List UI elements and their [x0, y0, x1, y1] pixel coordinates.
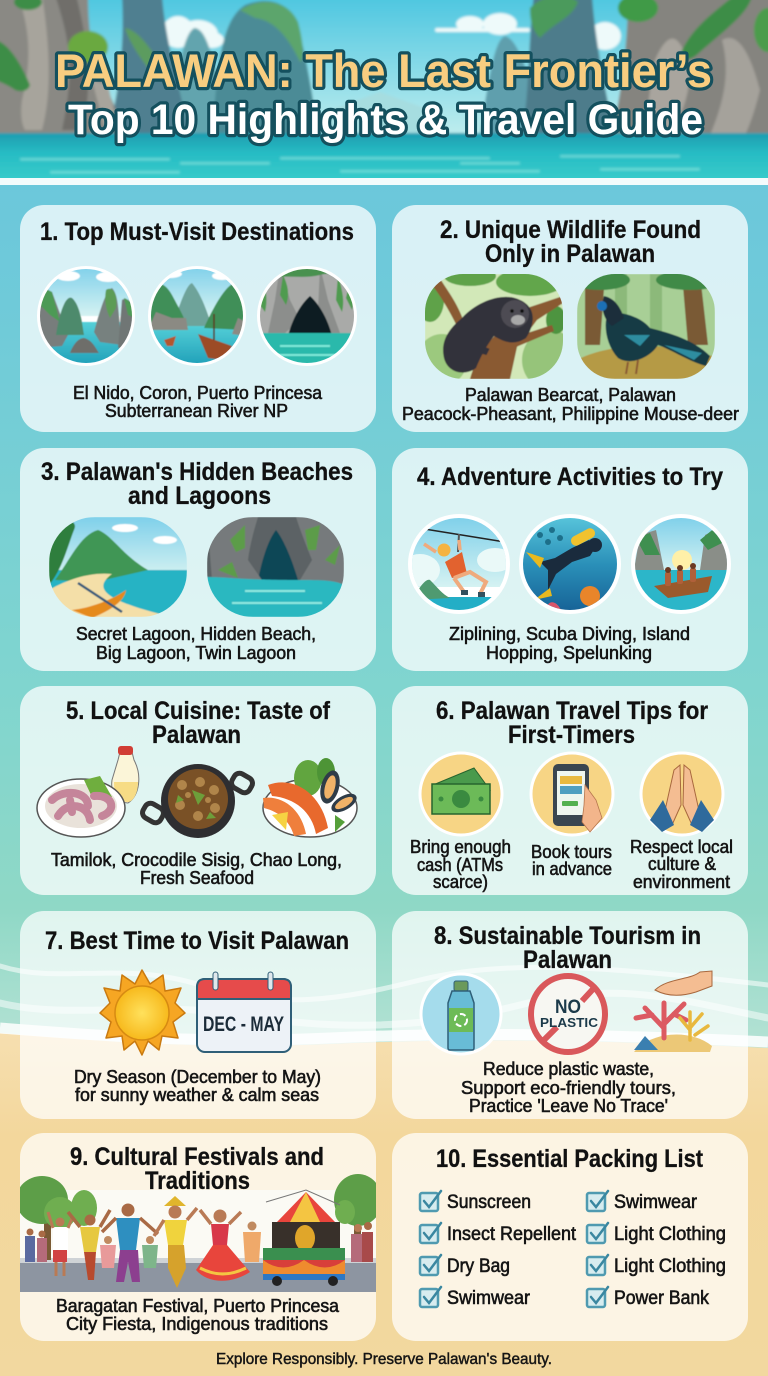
caption 2: Peacock-Pheasant, Philippine Mouse-deer: [402, 404, 739, 424]
caption 9: [56, 1296, 340, 1334]
tip: respect culture: culture &: [648, 854, 716, 874]
icon: no plastic sign: [531, 976, 605, 1052]
caption 9: City Fiesta, Indigenous traditions: [66, 1314, 328, 1334]
title: PALAWAN: The Last Frontier’s: [55, 44, 712, 97]
tip: respect culture: [630, 837, 733, 892]
checklist items: Swimwear: [614, 1192, 698, 1213]
tip: bring cash: cash (ATMs: [417, 855, 503, 875]
checklist items: Swimwear: [447, 1288, 531, 1309]
image: ziplining: [408, 514, 510, 614]
icon: reusable bottle: [421, 974, 501, 1054]
left cliff: [0, 0, 124, 135]
heading 8: [434, 922, 701, 974]
panel 6: travel tips: [392, 686, 748, 895]
heading 5: [66, 697, 331, 749]
dancers: [68, 1196, 261, 1288]
heading 2: 2. Unique Wildlife Found: [440, 216, 701, 244]
heading 10: 10. Essential Packing List: [436, 1145, 704, 1173]
caption 8: Practice 'Leave No Trace': [469, 1096, 668, 1116]
panel 7: best time to visit: [20, 911, 376, 1119]
heading 2: [440, 216, 701, 268]
heading 8: Palawan: [523, 946, 612, 974]
caption 1: Subterranean River NP: [105, 401, 288, 421]
right cliff: [612, 0, 768, 135]
icon: hand and coral: [634, 971, 712, 1052]
checklist items: Dry Bag: [447, 1256, 510, 1277]
caption 5: Fresh Seafood: [140, 868, 254, 888]
panel 9: cultural festivals: [16, 1133, 382, 1341]
heading 5: 5. Local Cuisine: Taste of: [66, 697, 331, 725]
header white divider: [0, 178, 768, 185]
caption 8: Reduce plastic waste,: [483, 1059, 654, 1079]
tip: book tours: [531, 842, 612, 879]
panel 4: adventure activities: [392, 448, 748, 671]
checklist items: Sunscreen: [447, 1192, 531, 1213]
background: sand with foam: [0, 966, 768, 1376]
title: [55, 44, 712, 144]
image: Palawan peacock-pheasant: [577, 274, 715, 379]
icon: no plastic sign: PLASTIC: [540, 1015, 599, 1030]
heading 6: [436, 697, 708, 749]
checklist items: Power Bank: [614, 1288, 709, 1309]
heading 9: Traditions: [145, 1167, 250, 1195]
heading 6: 6. Palawan Travel Tips for: [436, 697, 708, 725]
image: island hopping: [631, 514, 731, 615]
heading 9: [70, 1143, 324, 1195]
caption 7: Dry Season (December to May): [74, 1067, 321, 1087]
header banner scene: [0, 0, 768, 183]
heading 8: 8. Sustainable Tourism in: [434, 922, 701, 950]
icon: tamilok plate and vinegar bottle: [37, 746, 139, 837]
caption 1: [73, 383, 323, 421]
caption 3: Big Lagoon, Twin Lagoon: [96, 643, 296, 663]
caption 8: [461, 1059, 676, 1116]
checklist items: Light Clothing: [614, 1224, 726, 1245]
icon: calendar: [197, 972, 291, 1052]
icon: sun: [100, 970, 185, 1055]
heading 3: and Lagoons: [128, 482, 271, 510]
caption 4: Ziplining, Scuba Diving, Island: [449, 624, 690, 644]
title: Top 10 Highlights & Travel Guide: [68, 96, 703, 144]
image: El Nido lagoon: [36, 266, 136, 366]
caption 9: Baragatan Festival, Puerto Princesa: [56, 1296, 340, 1316]
icon: calendar: DEC - MAY: [203, 1013, 284, 1036]
panel 2: unique wildlife: [392, 205, 748, 432]
caption 4: Hopping, Spelunking: [486, 643, 652, 663]
caption 2: [402, 385, 739, 424]
caption 7: for sunny weather & calm seas: [75, 1085, 319, 1105]
festival float: [263, 1190, 345, 1286]
image: Palawan bearcat: [425, 274, 563, 379]
festival illustration: [16, 1174, 382, 1292]
tip: respect culture: environment: [633, 872, 730, 892]
checklist items: Light Clothing: [614, 1256, 726, 1277]
image: scuba diving: [519, 514, 621, 615]
caption 5: Tamilok, Crocodile Sisig, Chao Long,: [51, 850, 342, 870]
image: underground river cave: [257, 266, 357, 366]
caption 2: Palawan Bearcat, Palawan: [465, 385, 676, 405]
panel 5: local cuisine: [20, 686, 376, 895]
checklist items: Insect Repellent: [447, 1224, 577, 1245]
image: secret beach with kayak: [49, 517, 187, 618]
crowd: [25, 1212, 73, 1276]
caption 3: Secret Lagoon, Hidden Beach,: [76, 624, 316, 644]
heading 6: First-Timers: [508, 721, 635, 749]
tip: bring cash: scarce): [433, 872, 488, 892]
checklist icons: [420, 1191, 608, 1307]
tip: bring cash: Bring enough: [410, 837, 511, 857]
heading 3: 3. Palawan's Hidden Beaches: [41, 458, 353, 486]
panel 8: sustainable tourism: [392, 911, 748, 1119]
caption 5: [51, 850, 342, 888]
heading 1: 1. Top Must-Visit Destinations: [40, 218, 354, 246]
checklist items: [447, 1192, 726, 1309]
panel 3: hidden beaches and lagoons: [20, 448, 376, 671]
image: lagoon cave: [207, 517, 344, 617]
heading 2: Only in Palawan: [485, 240, 655, 268]
caption 7: [74, 1067, 321, 1105]
clouds: [162, 13, 621, 50]
tip: book tours: in advance: [532, 859, 612, 879]
sea: [0, 133, 768, 183]
image: Coron boats: [148, 266, 246, 366]
heading 7: 7. Best Time to Visit Palawan: [45, 927, 349, 955]
heading 3: [41, 458, 353, 510]
tip: bring cash: [410, 837, 511, 892]
icon: no plastic sign: NO: [555, 997, 581, 1018]
icon: cash: [420, 753, 502, 835]
icon: phone booking: [531, 753, 613, 835]
caption 1: El Nido, Coron, Puerto Princesa: [73, 383, 323, 403]
distant peaks: [177, 26, 218, 136]
panel 1: top must-visit destinations: [20, 205, 376, 432]
icon: praying hands: [641, 753, 723, 835]
caption 3: [76, 624, 316, 663]
heading 5: Palawan: [152, 721, 241, 749]
tip: respect culture: Respect local: [630, 837, 733, 857]
caption 4: [449, 624, 690, 663]
icon: fresh seafood plate: [263, 758, 360, 837]
icon: crocodile sisig pan: [140, 764, 255, 838]
heading 4: 4. Adventure Activities to Try: [417, 463, 723, 491]
tip: book tours: Book tours: [531, 842, 612, 862]
panel 10: essential packing list: [392, 1133, 748, 1341]
heading 9: 9. Cultural Festivals and: [70, 1143, 324, 1171]
caption 8: Support eco-friendly tours,: [461, 1078, 676, 1098]
footer tagline: Explore Responsibly. Preserve Palawan's Beauty.: [216, 1351, 552, 1368]
